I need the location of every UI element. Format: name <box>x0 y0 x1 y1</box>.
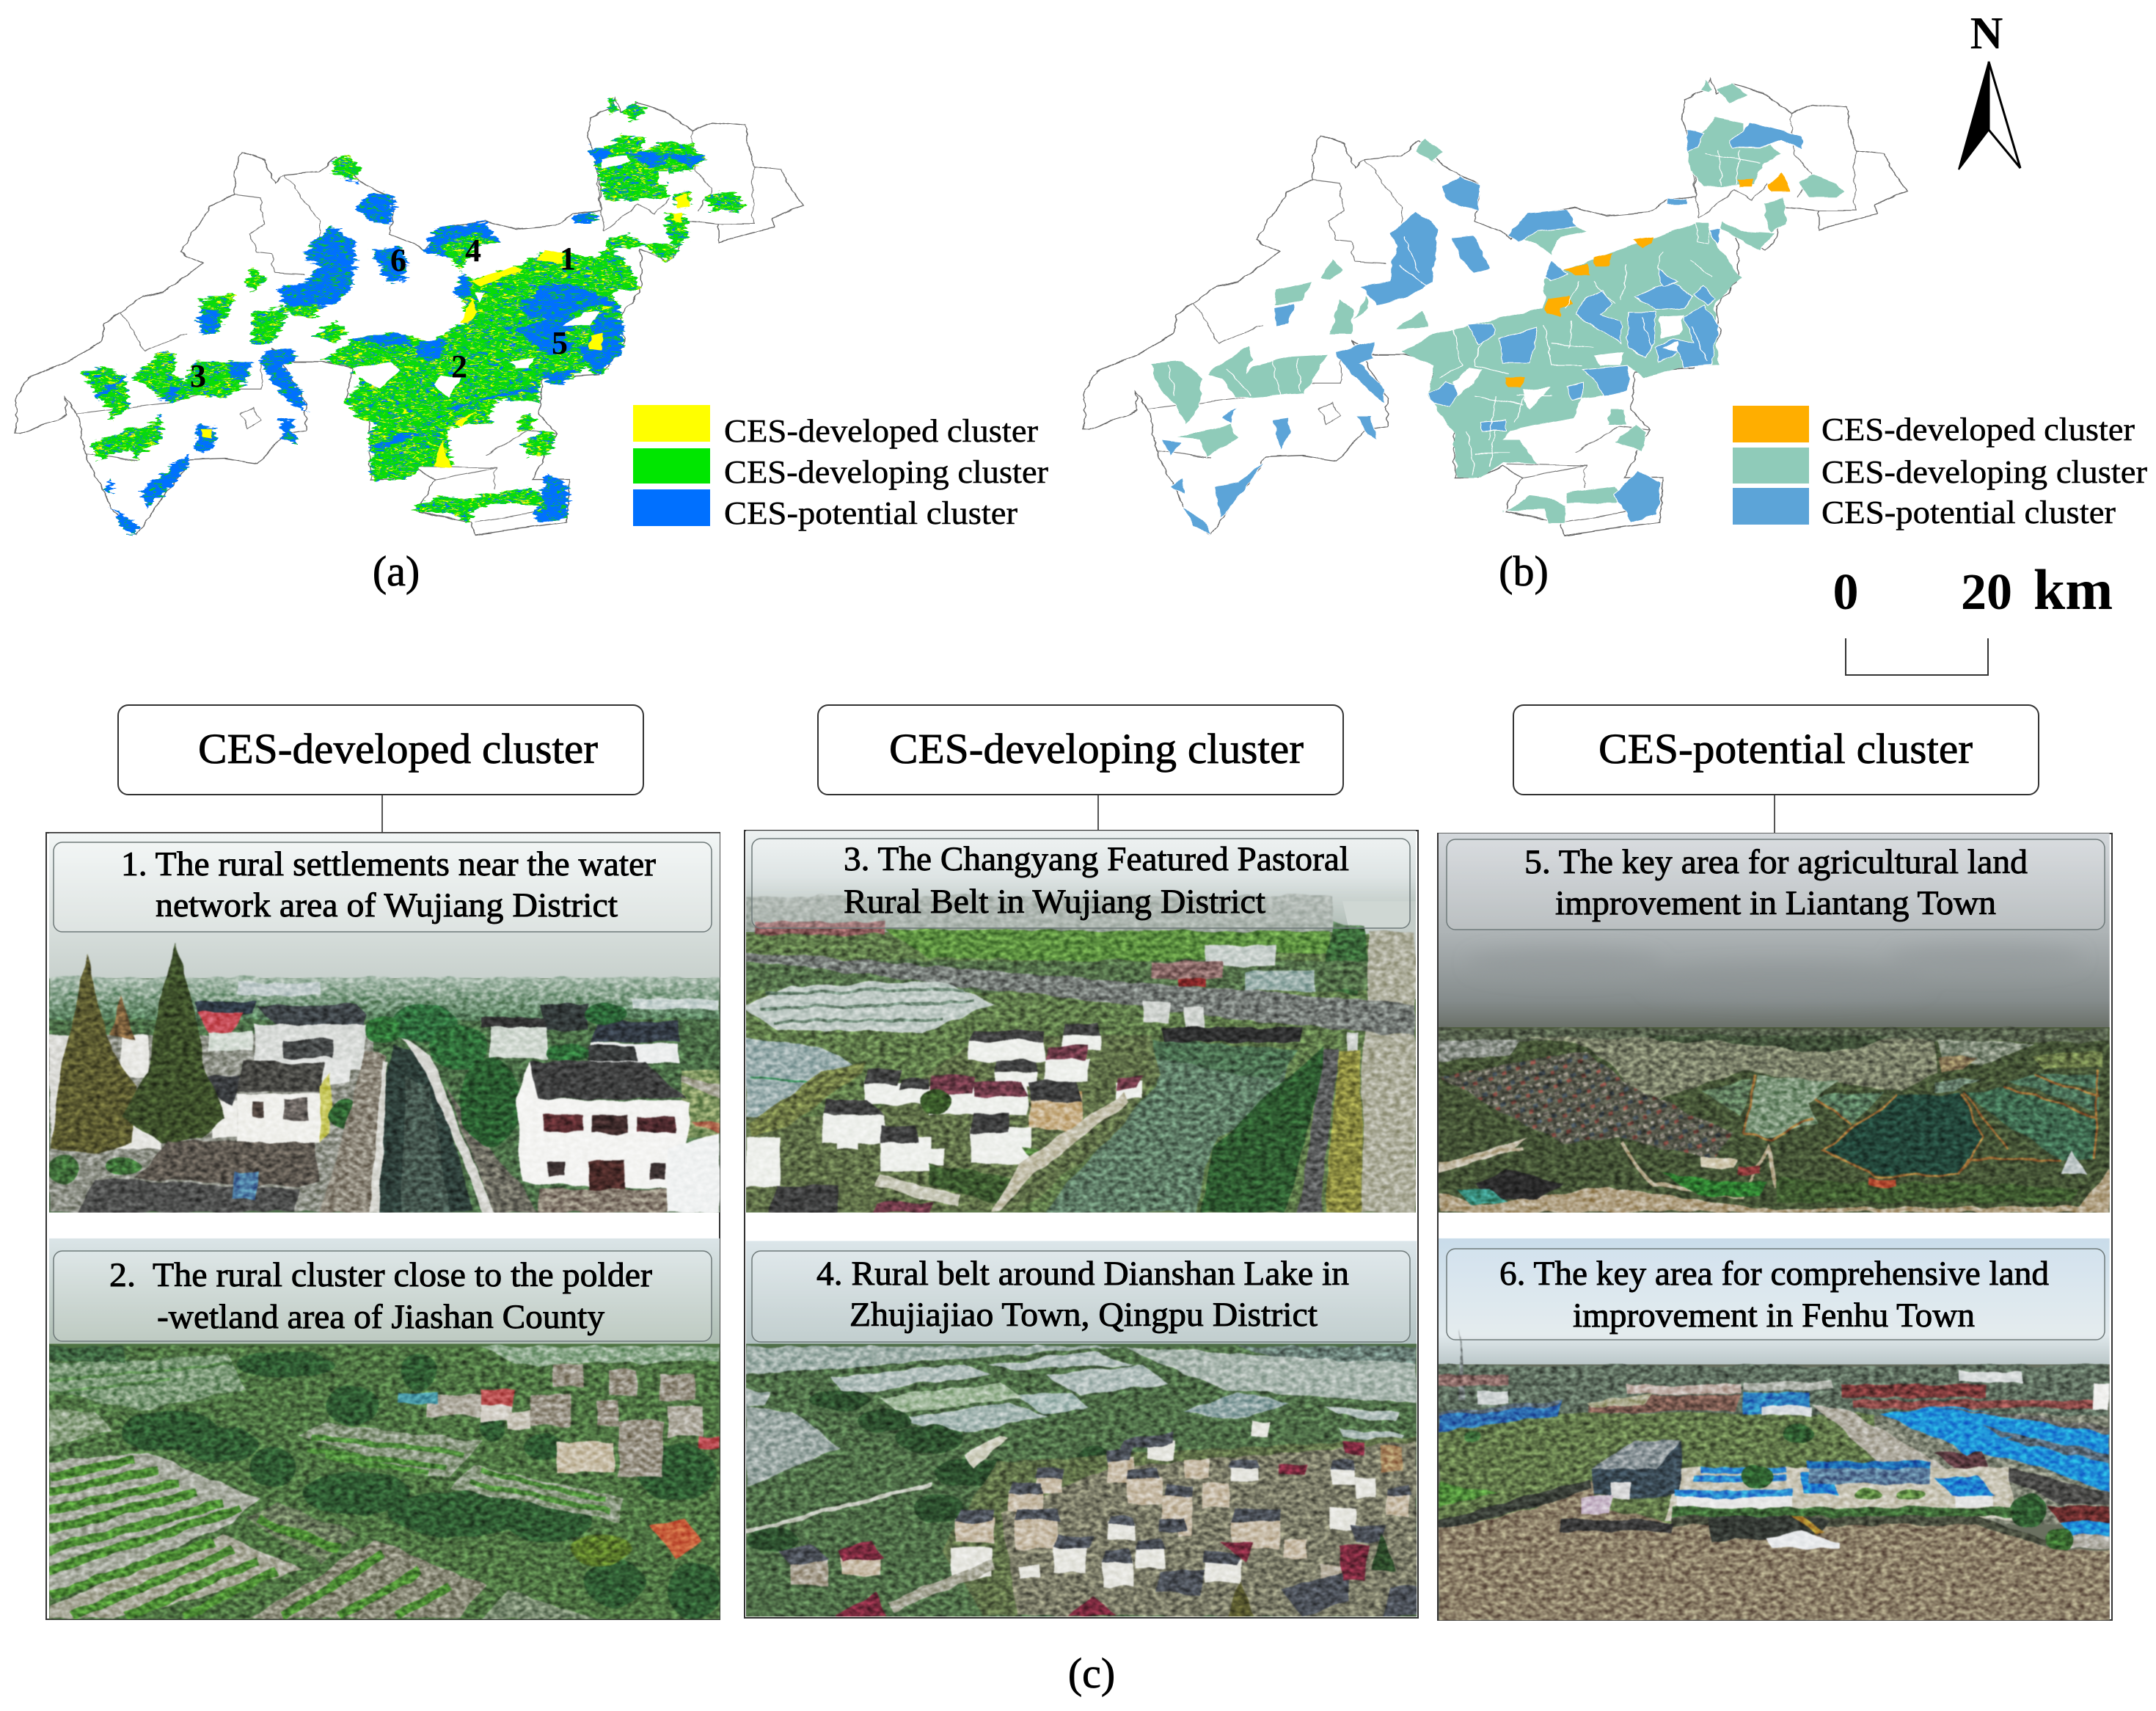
map (a) site number labels: 2 <box>451 349 467 384</box>
heading: CES-potential cluster: CES-potential cluster <box>1598 725 1973 773</box>
caption 4 <box>752 1251 1410 1342</box>
map (b) township patches <box>1151 79 1845 536</box>
caption 1: network area of Wujiang District <box>156 886 618 924</box>
photo 6: Fenhu comprehensive land <box>1439 1238 2110 1621</box>
scale bar: km <box>2033 558 2113 621</box>
caption (c): (c) <box>1068 1649 1115 1697</box>
map (b): township CES clusters <box>1083 79 1907 536</box>
heading: CES-developed cluster: CES-developed cluster <box>198 725 598 773</box>
legend for map (a): CES-developed cluster <box>724 413 1038 449</box>
caption 6: improvement in Fenhu Town <box>1573 1296 1975 1335</box>
developing patches <box>81 98 746 522</box>
map (a) site number labels <box>190 233 576 394</box>
caption 4: Zhujiajiao Town, Qingpu District <box>849 1296 1318 1334</box>
map (a) site number labels: 5 <box>552 325 568 361</box>
caption 6: 6. The key area for comprehensive land <box>1499 1255 2049 1293</box>
caption 6 <box>1447 1249 2105 1340</box>
heading: CES-developing cluster: CES-developing cluster <box>889 725 1304 773</box>
legend for map (a): CES-potential cluster <box>724 495 1017 531</box>
heading: CES-developing cluster <box>818 705 1343 795</box>
heading: CES-potential cluster <box>1513 705 2039 795</box>
photo 1: rural settlements by canal <box>48 833 720 1213</box>
north arrow <box>1959 9 2020 169</box>
photo 4: Dianshan Lake belt <box>746 1241 1417 1619</box>
developed townships <box>1505 172 1789 387</box>
north arrow: N <box>1970 9 2003 59</box>
caption 1 <box>54 842 712 932</box>
caption (a): (a) <box>373 547 420 595</box>
map (a) base outline <box>15 98 803 535</box>
heading: CES-developed cluster <box>118 705 643 795</box>
map (a) site number labels: 1 <box>560 241 576 277</box>
caption 2 <box>54 1251 712 1341</box>
legend for map (a) <box>633 405 1048 531</box>
map (a) site number labels: 3 <box>190 358 206 394</box>
map (b) base outline <box>1083 79 1907 536</box>
caption 4: 4. Rural belt around Dianshan Lake in <box>816 1255 1349 1293</box>
scale bar: 20 <box>1961 564 2012 621</box>
connector lines <box>382 795 1775 833</box>
caption 3: 3. The Changyang Featured Pastoral <box>844 840 1349 878</box>
caption 1: 1. The rural settlements near the water <box>121 845 656 883</box>
caption (b): (b) <box>1499 547 1549 595</box>
yellow overlays <box>200 193 692 468</box>
photo 3: Changyang pastoral belt <box>746 831 1416 1213</box>
map (a): raster CES clusters <box>15 98 803 535</box>
potential patches <box>102 177 599 535</box>
legend for map (a): CES-developing cluster <box>724 454 1048 490</box>
map (a) cluster patches <box>81 98 746 535</box>
map (a) site number labels: 4 <box>465 233 481 269</box>
caption 2: 2. The rural cluster close to the polder <box>109 1256 652 1294</box>
holes in cluster <box>353 156 668 398</box>
legend for map (b) <box>1733 406 2147 530</box>
caption 5 <box>1447 839 2105 930</box>
caption 5: 5. The key area for agricultural land <box>1524 843 2028 881</box>
panel: CES-developed photos <box>46 833 721 1621</box>
potential townships <box>1161 123 1802 536</box>
legend for map (b): CES-developing cluster <box>1821 454 2147 490</box>
caption 3: Rural Belt in Wujiang District <box>844 883 1265 921</box>
caption 3 <box>752 839 1410 928</box>
photo 5: Liantang agricultural land <box>1439 833 2110 1214</box>
legend for map (b): CES-developed cluster <box>1821 412 2135 448</box>
caption 5: improvement in Liantang Town <box>1555 884 1996 922</box>
legend for map (b): CES-potential cluster <box>1821 495 2116 530</box>
blue overlays on green <box>95 147 706 453</box>
panel: CES-developing photos <box>745 831 1418 1619</box>
panel: CES-potential photos <box>1438 833 2112 1621</box>
photo 2: polder wetland <box>49 1238 721 1621</box>
scale bar <box>1832 558 2113 675</box>
developing townships <box>1151 79 1845 523</box>
township boundaries and holes <box>1168 150 1761 475</box>
caption 2: -wetland area of Jiashan County <box>157 1298 604 1336</box>
map (a) site number labels: 6 <box>390 242 406 278</box>
scale bar: 0 <box>1832 564 1859 621</box>
